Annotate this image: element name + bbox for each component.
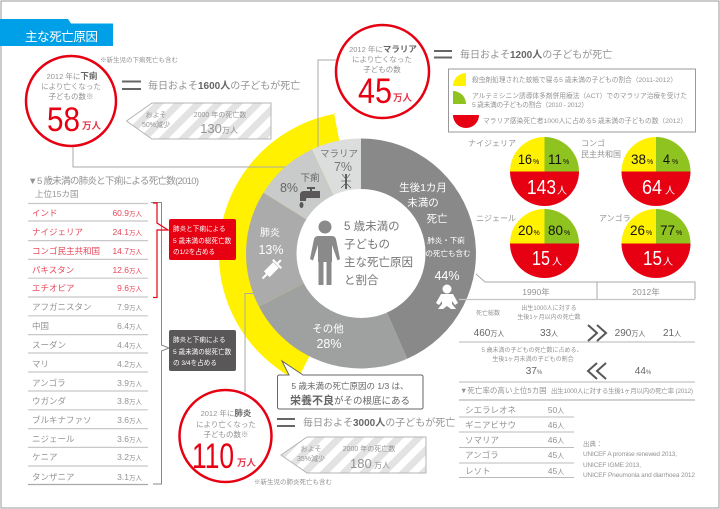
label: malaria: 7%: [334, 160, 352, 174]
circle: malaria deaths: 万人: [393, 93, 413, 104]
circle: diarrhoea deaths: 58: [47, 101, 80, 139]
neonatal comparison table: 44%: [635, 366, 652, 377]
table: top 15 countries: ケニア: [32, 452, 58, 462]
pie: Nigeria: %: [563, 159, 569, 166]
icon: baby: [436, 284, 458, 309]
table: top 15 countries: スーダン: [32, 340, 66, 350]
callout: undernutrition: [278, 361, 423, 409]
label: neonatal: 44%: [434, 269, 460, 283]
neonatal comparison table: 1990年: [522, 287, 550, 297]
circle: diarrhoea deaths: 2012 年に下痢: [47, 71, 98, 81]
pie: Nigeria: [468, 137, 579, 206]
circle: pneumonia deaths: 110: [192, 437, 234, 476]
pie: DR Congo: %: [672, 159, 678, 166]
icon: faucet: [300, 187, 320, 208]
circle: pneumonia deaths: 子どもの数※: [204, 429, 248, 439]
neonatal comparison table: 290万人: [615, 328, 645, 339]
circle: pneumonia deaths: [180, 390, 272, 482]
donut centre text: 5 歳未満の: [344, 220, 400, 233]
pie: Niger: [476, 209, 579, 278]
yellow sector: one third undernutrition: [219, 113, 361, 380]
daily deaths pneumonia: 毎日およそ3000人の子どもが死亡: [303, 416, 455, 429]
arrow box: pneumonia: [281, 437, 426, 473]
pie: Niger: %: [564, 230, 570, 237]
table: top 15 countries: 4.2万人: [117, 359, 142, 369]
table: top 15 countries: 14.7万人: [112, 246, 142, 256]
sources: UNICEF IGME 2013,: [583, 462, 641, 469]
label: diarrhoea: 8%: [280, 181, 298, 195]
pie: DR Congo: %: [647, 159, 653, 166]
table: top 15 countries: パキスタン: [32, 265, 74, 275]
neonatal comparison table: 出生1000人に対する: [521, 304, 577, 312]
table: top 15 countries: 3.6万人: [117, 434, 142, 444]
arrow: increase: [588, 325, 606, 341]
connector lines: [73, 60, 336, 392]
pie: Angola: 77: [660, 222, 675, 238]
heading: top 5 mortality: [460, 385, 693, 395]
callout: three quarters of deaths: 肺炎と下痢による: [173, 336, 226, 344]
table: top 15 countries: アフガニスタン: [32, 302, 92, 312]
arrow box: diarrhoea: 130万人: [200, 121, 238, 136]
donut chart: [246, 138, 476, 368]
label: neonatal: 肺炎・下痢: [427, 236, 465, 245]
heading: country table: ▼: [28, 176, 37, 187]
pie: Niger: 15: [532, 248, 550, 270]
pie: DR Congo: 民主共和国: [581, 149, 621, 159]
arrow box: diarrhoea: およそ: [146, 111, 166, 119]
neonatal comparison table: 生後1ヶ月以内の死亡数: [517, 313, 581, 321]
pie: Nigeria: %: [533, 159, 539, 166]
pie: Angola: %: [676, 230, 682, 237]
table: top 15 countries: ブルキナファソ: [32, 415, 92, 425]
table: top 15 countries: [28, 204, 148, 484]
table: top 5 mortality: レソト: [465, 466, 491, 476]
table: top 5 mortality: 50人: [548, 405, 564, 415]
donut centre text: 子どもの: [344, 238, 390, 251]
label: other: 28%: [316, 337, 342, 351]
equals sign: [122, 82, 141, 89]
heading: country table: 5 歳未満の肺炎と下痢による死亡数(2010): [37, 175, 199, 187]
title: [0, 19, 113, 46]
daily deaths malaria: 毎日およそ1200人の子どもが死亡: [460, 48, 612, 61]
arrow box: pneumonia: およそ: [300, 445, 322, 453]
legend: マラリア感染死亡者1000人に占める5 歳未満の子どもの数（2012）: [483, 116, 687, 125]
neonatal comparison table: 死亡総数: [476, 309, 500, 317]
circle: malaria deaths: [336, 25, 429, 118]
circle: pneumonia deaths: 万人: [237, 458, 257, 469]
pie: DR Congo: 38: [631, 151, 646, 167]
circle: malaria deaths: 2012 年にマラリア: [349, 44, 417, 54]
pie: Angola: アンゴラ: [599, 213, 631, 223]
callout: half of deaths: 5 歳未満の総死亡数: [173, 236, 232, 245]
circle: diarrhoea deaths: 子どもの数※: [48, 91, 94, 101]
neonatal comparison table: 37%: [526, 366, 543, 377]
callout: undernutrition: 5 歳未満の死亡原因の 1/3 は、: [291, 381, 409, 391]
table: top 15 countries: 3.9万人: [117, 378, 142, 388]
label: neonatal: 生後1カ月: [399, 181, 447, 194]
pie: Angola: %: [646, 230, 652, 237]
neonatal comparison table: [459, 274, 695, 382]
callout: three quarters of deaths: [169, 330, 236, 371]
pie: DR Congo: コンゴ: [581, 138, 605, 148]
note: ※新生児の肺炎死亡も含む: [254, 477, 332, 486]
arrow box: pneumonia: 35%減少: [297, 454, 325, 463]
neonatal comparison table: 21人: [663, 328, 681, 339]
arrow box: diarrhoea: [126, 103, 271, 139]
table: top 15 countries: 3.2万人: [117, 452, 142, 462]
pie: Nigeria: ナイジェリア: [468, 139, 516, 148]
callout: half of deaths: 肺炎と下痢による: [173, 225, 226, 233]
title: 主な死亡原因: [25, 30, 98, 44]
table: top 15 countries: ニジェール: [32, 434, 75, 444]
table: top 15 countries: 9.6万人: [117, 283, 142, 293]
pie: Niger: %: [534, 230, 540, 237]
callout: half of deaths: の1/2を占める: [173, 247, 215, 256]
table: top 15 countries: インド: [32, 208, 58, 218]
pie: DR Congo: 64: [642, 177, 662, 199]
table: top 15 countries: タンザニア: [32, 472, 75, 482]
table: top 5 mortality: シエラレオネ: [465, 405, 516, 415]
table: top 15 countries: アンゴラ: [32, 378, 66, 388]
table: top 5 mortality: ソマリア: [465, 435, 499, 445]
table: top 15 countries: 7.9万人: [117, 302, 142, 312]
table: top 5 mortality: アンゴラ: [465, 450, 499, 460]
circle: malaria deaths: により亡くなった: [352, 54, 412, 64]
label: neonatal: 未満の: [407, 197, 439, 209]
table: top 15 countries: 中国: [32, 321, 49, 331]
table: top 15 countries: コンゴ民主共和国: [32, 246, 100, 256]
label: diarrhoea: 下痢: [300, 173, 320, 184]
icon: syringe: [258, 256, 285, 283]
donut centre text: と割合: [344, 274, 379, 287]
circle: diarrhoea deaths: [26, 56, 116, 146]
label: pneumonia: 肺炎: [260, 227, 280, 239]
heading: top 5 mortality: ▼死亡率の高い上位5カ国: [460, 385, 547, 395]
table: top 15 countries: 6.4万人: [117, 321, 142, 331]
circle: diarrhoea deaths: により亡くなった: [41, 81, 101, 91]
circle: malaria deaths: 45: [358, 72, 392, 111]
table: top 15 countries: 24.1万人: [112, 227, 142, 237]
neonatal comparison table: 33人: [540, 328, 558, 339]
table: top 5 mortality: 46人: [548, 420, 564, 430]
label: neonatal: 死亡: [426, 212, 448, 225]
table: top 5 mortality: ギニアビサウ: [465, 420, 516, 430]
neonatal comparison table: 460万人: [474, 328, 504, 339]
donut centre text: [344, 220, 413, 287]
pie: Angola: 人: [663, 257, 673, 268]
sources: UNICEF A promise renewed 2013,: [583, 451, 677, 458]
arrow: decrease: [588, 363, 606, 379]
sources: UNICEF Pneumonia and diarrhoea 2012: [583, 472, 695, 479]
pie: Niger: 20: [518, 222, 533, 238]
pie: Nigeria: 11: [548, 151, 562, 167]
table: top 15 countries: 3.1万人: [117, 472, 142, 482]
sources: 出典：: [583, 439, 602, 448]
circle: diarrhoea deaths: 万人: [82, 121, 102, 132]
note: ※新生児の下痢死亡も含む: [100, 55, 178, 64]
arrow box: pneumonia: 2000 年の死亡数: [343, 444, 395, 453]
label: other: その他: [312, 322, 344, 335]
table: top 15 countries: 3.8万人: [117, 396, 142, 406]
neonatal comparison table: 生後1ヶ月未満の子どもの割合: [492, 355, 574, 363]
icon: mosquito: [341, 174, 351, 189]
callout: three quarters of deaths: の 3/4を占める: [173, 358, 217, 367]
legend: 殺虫剤処理された蚊帳で寝る5 歳未満の子どもの割合（2011-2012）: [472, 75, 677, 84]
table: top 15 countries: ナイジェリア: [32, 227, 83, 237]
label: neonatal: [399, 181, 470, 283]
bracket: top 5: [153, 203, 168, 298]
bracket: top 15: [151, 202, 169, 484]
legend: アルテミシニン誘導体多剤併用療法（ACT）でのマラリア治療を受けた: [472, 91, 687, 100]
callout: half of deaths: [169, 219, 236, 260]
icon: person: [310, 220, 340, 285]
circle: pneumonia deaths: により亡くなった: [196, 419, 256, 429]
arrow box: pneumonia: 180 万人: [350, 456, 390, 471]
table: top 15 countries: 12.6万人: [112, 265, 142, 275]
table: top 15 countries: ウガンダ: [32, 396, 67, 406]
heading: top 5 mortality: 出生1000人に対する生後1ヶ月以内の死亡率 (2012): [551, 386, 693, 395]
pie: Niger: 80: [548, 222, 563, 238]
pie: Nigeria: 143: [527, 177, 556, 199]
arrow box: diarrhoea: 50%減少: [142, 120, 170, 129]
pie: Angola: [599, 209, 690, 278]
legend: 5 歳未満の子どもの割合（2010 - 2012）: [472, 100, 588, 109]
daily deaths diarrhoea: 毎日およそ1600人の子どもが死亡: [148, 79, 300, 92]
label: pneumonia: [258, 227, 284, 257]
pie: Nigeria: 人: [557, 186, 567, 197]
table: top 5 mortality: 45人: [548, 450, 564, 460]
equals sign: [277, 419, 295, 426]
donut centre text: 主な死亡原因: [344, 255, 413, 269]
callout: three quarters of deaths: 5 歳未満の総死亡数: [173, 347, 232, 356]
pie: Nigeria: 16: [518, 151, 532, 167]
sources: [583, 439, 695, 479]
table: top 5 mortality: [459, 400, 695, 478]
equals sign: [434, 51, 452, 58]
table: top 15 countries: 3.6万人: [117, 415, 142, 425]
label: other: [312, 322, 344, 351]
neonatal comparison table: 2012年: [632, 287, 660, 297]
label: malaria: [320, 149, 358, 174]
table: top 15 countries: 4.4万人: [117, 340, 142, 350]
circle: pneumonia deaths: 2012 年に肺炎: [201, 408, 252, 418]
pie: Niger: 人: [552, 257, 562, 268]
neonatal comparison table: 5 歳未満の子どもの死亡数に占める、: [481, 346, 583, 354]
circle: malaria deaths: 子どもの数: [363, 64, 401, 74]
pie: DR Congo: 人: [665, 186, 675, 197]
table: top 5 mortality: 46人: [548, 435, 564, 445]
legend: [448, 69, 696, 132]
label: neonatal: の死亡も含む: [426, 248, 470, 258]
label: malaria: マラリア: [320, 149, 358, 160]
pie: Angola: 26: [630, 222, 645, 238]
pie: Niger: ニジェール: [476, 214, 516, 223]
table: top 15 countries: マリ: [32, 359, 49, 369]
pie: DR Congo: [581, 137, 690, 206]
heading: country table: [28, 175, 199, 199]
pie: DR Congo: 4: [663, 151, 670, 167]
table: top 5 mortality: 45人: [548, 466, 564, 476]
label: diarrhoea: [280, 173, 320, 195]
callout: undernutrition: 栄養不良がその根底にある: [290, 393, 410, 407]
table: top 15 countries: エチオピア: [32, 283, 75, 293]
label: pneumonia: 13%: [258, 243, 284, 257]
heading: country table: 上位15カ国: [35, 189, 78, 199]
arrow box: diarrhoea: 2000 年の死亡数: [194, 110, 246, 119]
pie: Angola: 15: [643, 248, 662, 270]
table: top 15 countries: 60.9万人: [112, 208, 142, 218]
